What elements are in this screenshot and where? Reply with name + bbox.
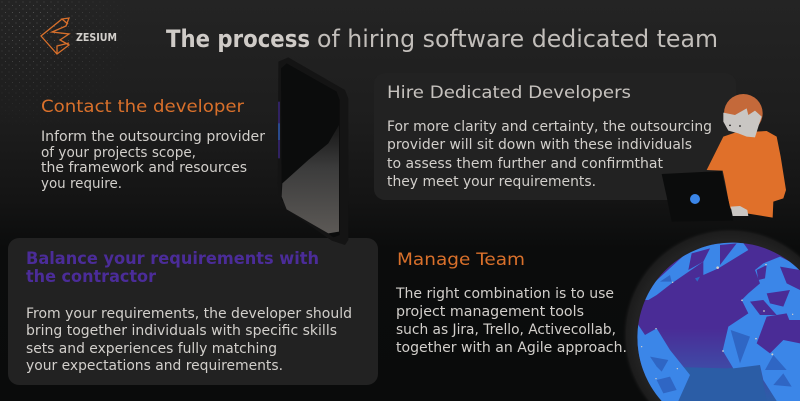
blue land masses: [635, 238, 800, 401]
text: balance body: From your requirements, the developer should: [26, 306, 352, 322]
title: of hiring software dedicated team: [317, 25, 718, 53]
text: manage body: The right combination is to use: [395, 286, 614, 302]
text: contact body: [41, 129, 265, 192]
heading: hire dedicated developers: Hire Dedicated Developers: [387, 83, 631, 103]
heading: balance your requirements: Balance your requirements with: [26, 249, 319, 269]
text: hire body: [387, 119, 712, 190]
title: The process: [166, 25, 310, 53]
laptop logo: [690, 194, 700, 204]
face: [723, 108, 762, 137]
heading: balance your requirements: the contractor: [26, 267, 157, 287]
panel: balance your requirements: [8, 238, 378, 385]
section: manage team: [395, 250, 627, 356]
text: hire body: to assess them further and confirmthat: [387, 156, 664, 172]
text: manage body: such as Jira, Trello, Activecollab,: [396, 322, 616, 338]
laptop: [662, 171, 733, 222]
text: manage body: [395, 286, 627, 356]
text: balance body: your expectations and requirements.: [26, 358, 283, 374]
text: balance body: bring together individuals with specific skills: [26, 323, 337, 339]
section: contact the developer: [41, 97, 265, 192]
text: contact body: of your projects scope,: [41, 145, 196, 161]
network nodes: [640, 264, 794, 380]
text: balance body: [26, 306, 352, 374]
icon: person with laptop: [662, 94, 786, 222]
heading: balance your requirements: [26, 249, 319, 287]
text: hire body: provider will sit down with these individuals: [387, 137, 692, 153]
text: hire body: they meet your requirements.: [387, 174, 596, 190]
text: balance body: sets and experiences fully matching: [26, 341, 277, 357]
icon: phone: [278, 57, 348, 245]
text: contact body: you require.: [41, 176, 122, 192]
knee: [731, 206, 748, 216]
text: contact body: Inform the outsourcing provider: [41, 129, 265, 145]
dark lower land: [660, 365, 767, 401]
panel: hire dedicated developers: [374, 73, 736, 200]
shirt: [707, 131, 786, 218]
icon: logo mark: [41, 18, 69, 54]
heading: contact the developer: Contact the developer: [41, 97, 244, 117]
purple facets: [688, 243, 800, 353]
text: manage body: together with an Agile approach.: [396, 340, 627, 356]
hair: [724, 94, 763, 133]
text: zesium: ZESIUM: [76, 32, 117, 44]
darker triangles: [650, 275, 792, 393]
icon: globe: [622, 227, 800, 401]
text: manage body: project management tools: [396, 304, 584, 320]
logo: zesium: [41, 18, 117, 54]
text: hire body: For more clarity and certainty, the outsourcing: [387, 119, 712, 135]
heading: manage team: Manage Team: [397, 250, 525, 270]
text: contact body: the framework and resources: [41, 160, 247, 176]
